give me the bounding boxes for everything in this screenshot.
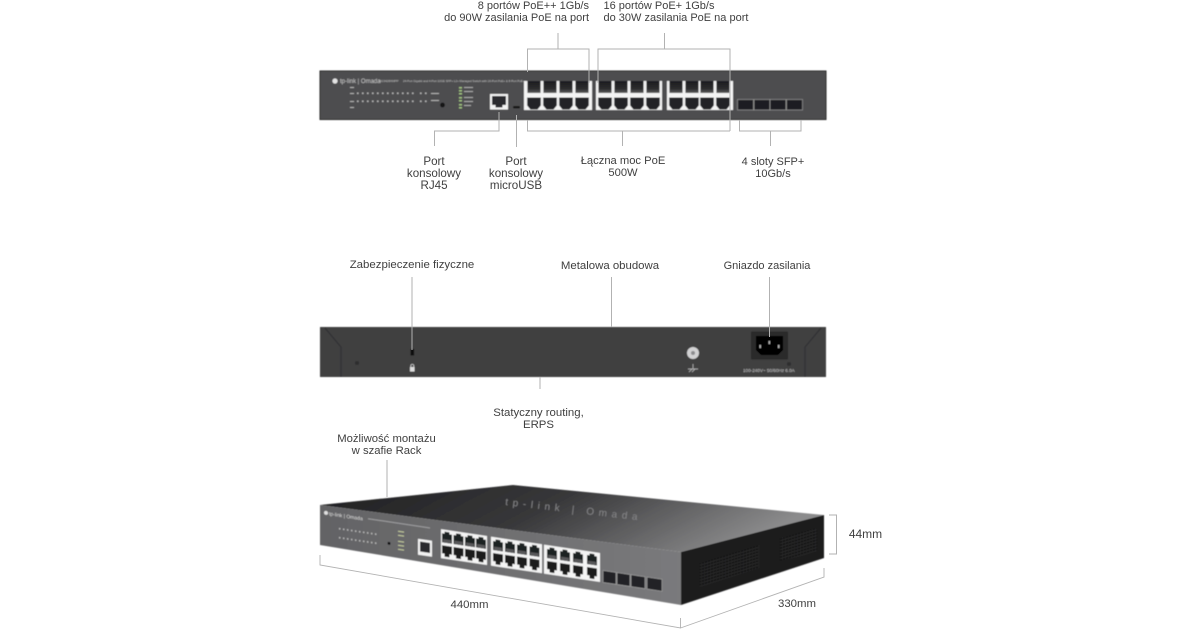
label: static routing: ERPS [523,419,554,431]
front face [320,505,681,605]
label: total PoE power: Łączna moc PoE [581,155,665,167]
top face [320,485,824,552]
brand and model line: tp-link | Omada [340,79,381,85]
switch rear view [320,327,826,377]
label: total PoE power: 500W [608,167,638,179]
label: 44mm: 44mm [849,527,882,541]
callouts rear [412,277,770,389]
power rating text: 100-240V~ 50/60Hz 6.0A [743,368,796,373]
iso reset [388,542,390,545]
PoE port block 2 [596,81,662,110]
label: rack mount: Możliwość montażu [337,433,436,445]
side vents [700,528,817,587]
label: 330mm: 330mm [778,598,816,610]
iso port block 1 [441,529,487,565]
green mode LEDs [459,87,473,108]
PoE port block 3 [667,81,733,110]
label: SFP+ slots: 10Gb/s [755,168,791,180]
label: microUSB console: microUSB [490,179,542,192]
iso SFP slots [603,570,662,591]
label: microUSB console: Port [505,155,527,168]
label: RJ45 console: konsolowy [407,167,461,180]
microUSB console port [513,106,520,108]
label: physical security: Zabezpieczenie fizyczne [350,259,474,271]
iso LEDs [339,522,404,551]
corner bevels [325,328,821,377]
iso brand: tp-link | Omada [329,511,363,522]
switch front view [320,71,826,120]
right side face [681,515,824,605]
iso port block 3 [544,545,600,582]
brand and model line [332,78,526,85]
label: 8 ports PoE++: do 90W zasilania PoE na port [444,12,589,24]
dimension bracket 44mm [829,515,836,554]
SFP+ slots [738,100,802,110]
top logo: tp-link | Omada [505,497,638,523]
label: 440mm: 440mm [451,599,488,611]
brand and model line: SG3428XMPP [379,79,399,83]
rear chassis [320,327,826,377]
label: rack mount: w szafie Rack [351,445,422,457]
PoE port block 1 [524,81,592,110]
label: 16 ports PoE+: do 30W zasilania PoE na port [604,12,748,24]
label: SFP+ slots: 4 sloty SFP+ [742,156,804,168]
label: static routing: Statyczny routing, [493,407,584,419]
label: metal case: Metalowa obudowa [561,260,660,272]
screw holes [355,361,791,366]
ground screw and symbol [687,347,699,372]
label: RJ45 console: RJ45 [420,179,448,192]
callouts front: PoE++ and PoE+ brackets [528,33,730,131]
brand and model line: 24-Port Gigabit and 4-Port 10GE SFP+ L2+ Managed Switch with 16-Port PoE+ & 8-Port PoE++ [403,79,526,83]
callout rack [386,460,388,497]
front panel contents [324,511,662,591]
RJ45 console port [490,94,508,110]
label: 8 ports PoE++: 8 portów PoE++ 1Gb/s [478,0,589,12]
status LED grid [350,87,439,108]
switch isometric view [320,485,824,605]
iso console port [418,539,432,557]
iso brand [324,511,430,532]
callouts front: console, total power and SFP+ brackets [434,112,801,147]
front chassis [320,71,826,120]
label: 16 ports PoE+: 16 portów PoE+ 1Gb/s [604,0,715,12]
dimension line 440mm and 330mm [320,555,824,628]
reset button [440,103,445,107]
label: RJ45 console: Port [423,155,445,168]
label: microUSB console: konsolowy [489,167,543,180]
power socket [752,332,788,359]
iso port block 2 [491,537,542,573]
lock slot and icon [410,349,414,372]
label: power socket: Gniazdo zasilania [724,260,811,272]
